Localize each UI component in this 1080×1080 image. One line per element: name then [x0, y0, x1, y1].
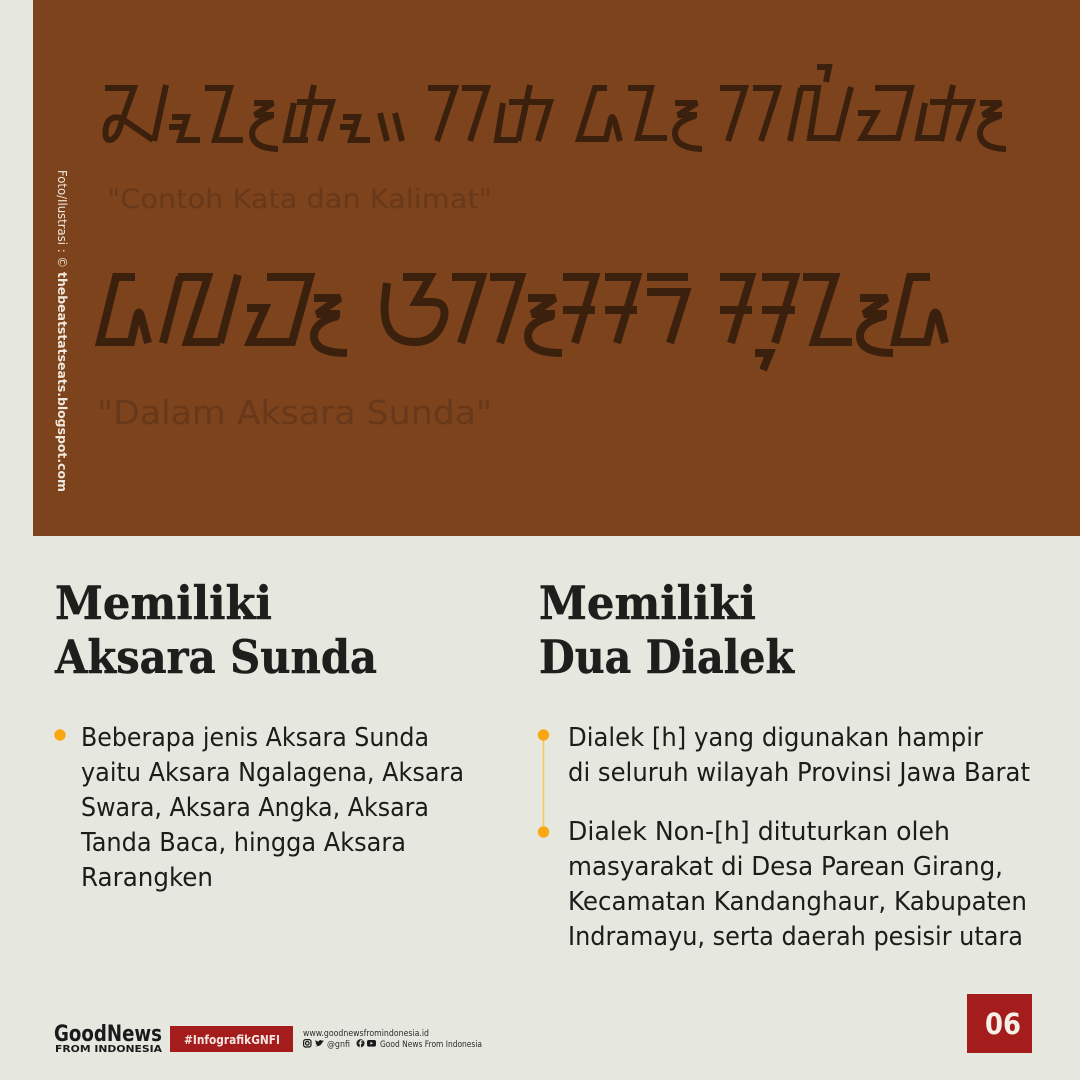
- heading: Memiliki Dua Dialek: [539, 576, 795, 684]
- heading: Memiliki Aksara Sunda: [54, 576, 377, 684]
- caption: in Sundanese script: "Dalam Aksara Sunda": [97, 393, 492, 432]
- heading: Memiliki Dua Dialek: Dua Dialek: [539, 630, 795, 684]
- bullet text: Aksara Sunda types: [54, 723, 464, 893]
- icon: instagram: [304, 1040, 311, 1047]
- heading: Memiliki Aksara Sunda: Aksara Sunda: [54, 630, 377, 684]
- bullet markers with connector: [538, 729, 549, 838]
- website and social handles: [303, 1029, 482, 1050]
- hashtag badge: [170, 1026, 293, 1052]
- bullet text: Aksara Sunda types: Beberapa jenis Aksara Sunda: [81, 723, 429, 753]
- website and social handles: www.goodnewsfromindonesia.id: [303, 1029, 429, 1039]
- icon: youtube: [367, 1040, 376, 1047]
- logo: GoodNews From Indonesia: [54, 1022, 162, 1055]
- bullet text: Aksara Sunda types: Tanda Baca, hingga Aksara: [80, 828, 406, 858]
- hashtag badge: #InfografikGNFI: [184, 1032, 280, 1047]
- icon: facebook: [356, 1039, 364, 1047]
- photo credit: Foto/Ilustrasi : ©: [55, 170, 69, 268]
- icon: twitter: [315, 1040, 324, 1046]
- bullet text: dialect h: Dialek [h] yang digunakan hampir: [568, 723, 983, 753]
- heading: Memiliki Dua Dialek: Memiliki: [539, 576, 756, 630]
- logo: GoodNews From Indonesia: GoodNews: [54, 1022, 162, 1047]
- bullet text: dialect non-h: Indramayu, serta daerah pesisir utara: [568, 922, 1023, 952]
- bullet text: Aksara Sunda types: Rarangken: [81, 863, 213, 893]
- panel: brown Sundanese script illustration: [33, 0, 1080, 536]
- logo: GoodNews From Indonesia: FROM INDONESIA: [55, 1044, 162, 1055]
- website and social handles: @gnfi: [327, 1040, 350, 1050]
- illustration: Sundanese script line one: [105, 67, 1006, 149]
- bullet text: dialect h: [568, 723, 1030, 788]
- page number badge: 06: [985, 1007, 1021, 1041]
- bullet text: dialect non-h: Dialek Non-[h] dituturkan oleh: [568, 817, 950, 847]
- illustration: Sundanese script line two: [100, 275, 945, 370]
- bullet text: dialect non-h: Kecamatan Kandanghaur, Kabupaten: [568, 887, 1027, 917]
- page number badge: [967, 994, 1032, 1053]
- photo credit: thebeatstatseats.blogspot.com: [55, 272, 69, 492]
- bullet text: dialect non-h: [568, 817, 1027, 952]
- bullet text: dialect h: di seluruh wilayah Provinsi Jawa Barat: [568, 758, 1030, 788]
- website and social handles: Good News From Indonesia: [380, 1040, 482, 1050]
- bullet text: Aksara Sunda types: yaitu Aksara Ngalagena, Aksara: [81, 758, 464, 788]
- bullet text: Aksara Sunda types: Swara, Aksara Angka, Aksara: [81, 793, 429, 823]
- bullet text: dialect non-h: masyarakat di Desa Parean Girang,: [568, 852, 1003, 882]
- caption: example words: "Contoh Kata dan Kalimat": [107, 184, 492, 215]
- heading: Memiliki Aksara Sunda: Memiliki: [55, 576, 272, 630]
